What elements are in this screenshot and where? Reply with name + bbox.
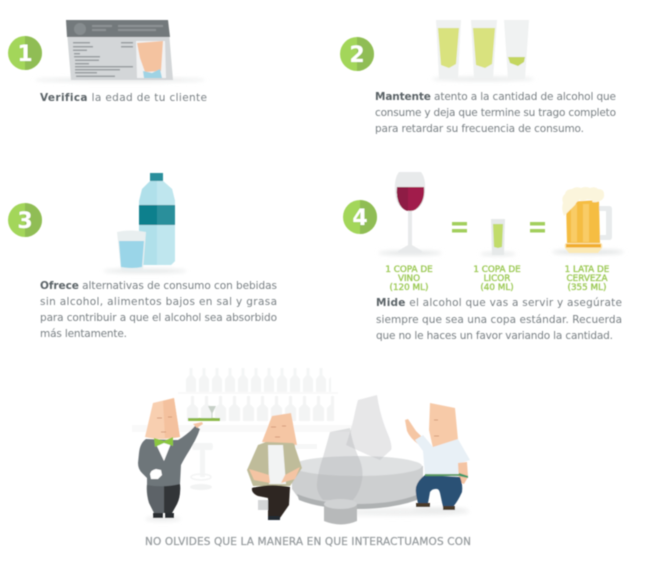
label: beer: CERVEZA — [567, 274, 607, 284]
icon: equals sign — [452, 222, 467, 232]
panel: step 4 — [343, 172, 624, 342]
panel: step 3: sin alcohol, alimentos bajos en sal y grasa — [40, 296, 277, 308]
panel: step 2: para retardar su frecuencia de consumo. — [375, 123, 584, 135]
label: wine: (120 ML) — [390, 283, 428, 293]
character: waiter — [138, 398, 220, 521]
bar shelves, bottles and stools — [132, 368, 352, 490]
label: liquor: LICOR — [484, 274, 510, 284]
label: beer: (355 ML) — [568, 283, 606, 293]
icon: water bottle and glass — [103, 173, 187, 273]
caption: NO OLVIDES QUE LA MANERA EN QUE INTERACTUAMOS CON — [145, 536, 471, 548]
panel: step 3: para contribuir a que el alcohol sea absorbido — [40, 312, 277, 324]
panel: step 3 — [8, 173, 277, 340]
text: ofrece: Ofrece alternativas de consumo con bebidas — [40, 280, 277, 292]
badge 2 — [340, 37, 374, 71]
badge 1 — [8, 36, 42, 70]
illustration: bar scene — [132, 368, 470, 524]
label: beer: 1 LATA DE — [565, 265, 609, 275]
badge 4 — [343, 200, 377, 234]
label: liquor: (40 ML) — [480, 283, 514, 293]
text: mide: Mide el alcohol que vas a servir y asegúrate — [376, 297, 622, 309]
text: verifica: Verifica la edad de tu cliente — [40, 92, 207, 104]
icon: beer mug — [552, 187, 624, 254]
label: wine: VINO — [398, 274, 420, 284]
translucent shapes — [317, 395, 392, 500]
panel: step 2: consume y deja que termine su trago completo — [375, 107, 616, 119]
badge 3 — [8, 203, 42, 237]
badge 4: 4 — [352, 206, 368, 231]
label: wine: 1 COPA DE — [385, 265, 433, 275]
badge 1: 1 — [17, 42, 33, 67]
panel: step 3: más lentamente. — [40, 328, 127, 340]
badge 3: 3 — [17, 209, 33, 234]
icon: wine glass — [378, 172, 442, 255]
panel: step 2 — [340, 20, 616, 135]
panel: step 4: siempre que sea una copa estándar. Recuerda — [376, 314, 622, 326]
icon: shot glass — [480, 219, 516, 256]
label: liquor: 1 COPA DE — [473, 265, 521, 275]
stool — [324, 499, 357, 524]
character: seated man — [247, 413, 302, 520]
character: man in blue shirt — [405, 403, 470, 512]
icon: equals sign — [530, 222, 545, 232]
panel: step 1 — [8, 20, 207, 104]
icon: three shot glasses — [431, 20, 535, 80]
panel: step 4: que no le haces un favor variando la cantidad. — [376, 330, 613, 342]
table — [292, 456, 470, 516]
badge 2: 2 — [349, 43, 365, 68]
text: mantente: Mantente atento a la cantidad de alcohol que — [375, 91, 616, 103]
icon: id card — [34, 20, 206, 82]
